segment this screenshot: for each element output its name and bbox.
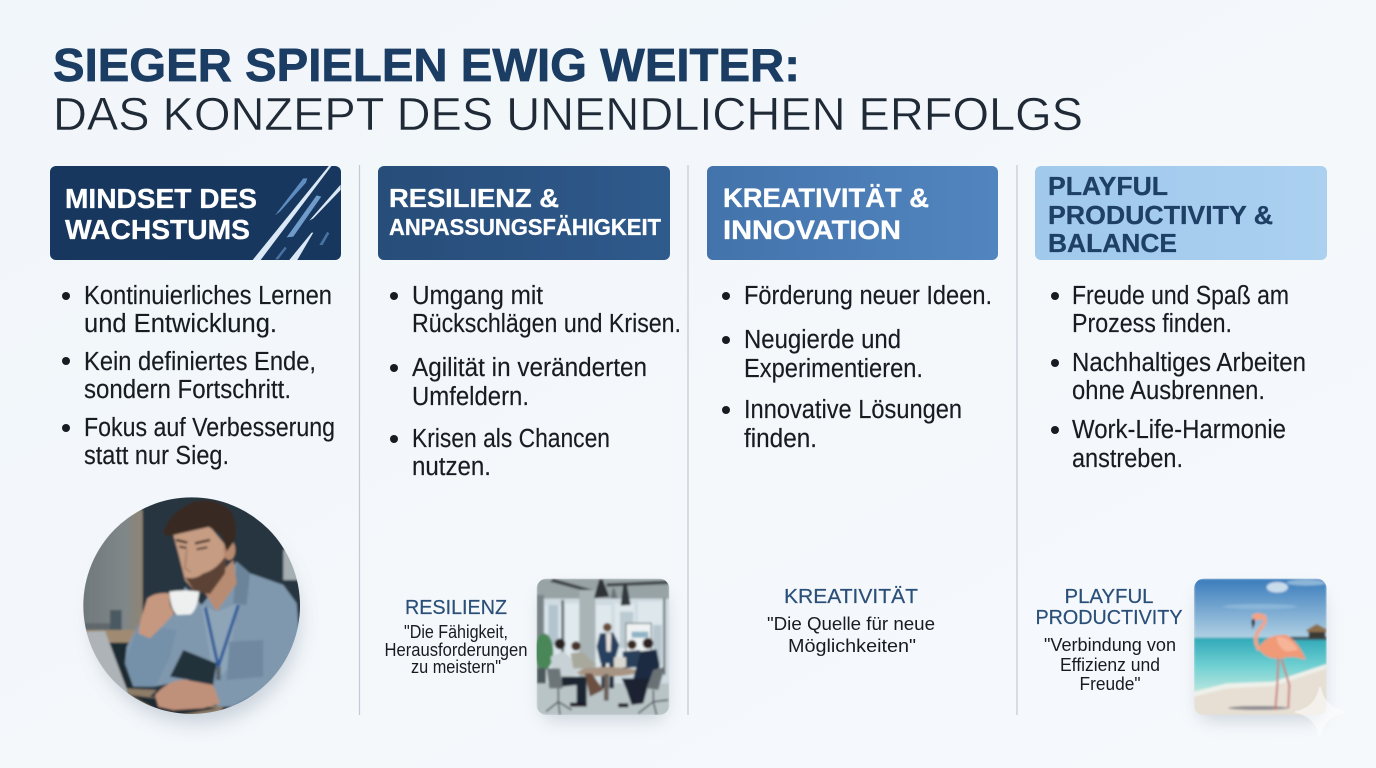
bullet list: Playful Productivity: anstreben. <box>1072 445 1183 473</box>
bullet list: Kreativität: Neugierde und <box>744 326 901 354</box>
brows and eyes <box>176 540 210 543</box>
photo: flamingo on beach <box>1194 579 1327 720</box>
raised hand <box>138 593 174 638</box>
header: Resilienz und Anpassungsfähigkeit <box>378 166 670 260</box>
header: Mindset des Wachstums: MINDSET DES <box>65 183 257 214</box>
bullet list: Resilienz: Agilität in veränderten <box>412 354 647 382</box>
panel: Playful Productivity <box>1035 166 1327 720</box>
photo: man with coffee at laptop <box>80 493 307 724</box>
bullet list: Playful Productivity: Work-Life-Harmonie <box>1072 416 1286 444</box>
bullet list: Resilienz: Umgang mit <box>412 282 543 310</box>
caption: Resilienz: "Die Fähigkeit, <box>404 622 508 642</box>
table <box>575 667 638 676</box>
caption: Playful Productivity <box>1036 586 1182 694</box>
header: Playful Productivity und Balance: PRODUCTIVITY & <box>1048 200 1273 230</box>
header: Kreativität und Innovation: KREATIVITÄT & <box>723 183 929 213</box>
plant <box>535 633 553 670</box>
bullet list: Playful Productivity: Freude und Spaß am <box>1072 282 1289 310</box>
caption: Kreativität: KREATIVITÄT <box>784 586 918 608</box>
whiteboard <box>626 623 651 663</box>
header: Mindset des Wachstums: WACHSTUMS <box>65 214 250 245</box>
header: Playful Productivity und Balance: BALANCE <box>1048 228 1177 258</box>
bullet list: Mindset: Kein definiertes Ende, <box>84 348 316 376</box>
header: Mindset des Wachstums <box>50 164 341 260</box>
person left 1 <box>555 639 565 649</box>
icon: sparkle <box>1296 688 1344 736</box>
ear <box>223 540 235 560</box>
panel: Mindset des Wachstums <box>50 164 341 724</box>
bullet list: Mindset: Kontinuierliches Lernen <box>84 282 332 310</box>
title: SIEGER SPIELEN EWIG WEITER: <box>53 39 800 91</box>
bullet list: Resilienz: nutzen. <box>412 453 491 481</box>
bullet list: Kreativität: Experimentieren. <box>744 355 923 383</box>
header: Kreativität und Innovation: INNOVATION <box>723 215 901 245</box>
bullet list: Kreativität <box>722 282 992 453</box>
caption: Playful Productivity: PLAYFUL <box>1064 586 1154 608</box>
neck <box>203 560 237 612</box>
header: Resilienz und Anpassungsfähigkeit: RESILIENZ & <box>389 183 559 213</box>
bullet list: Kreativität: finden. <box>744 425 817 453</box>
header: Kreativität und Innovation <box>707 166 998 260</box>
bullet list: Playful Productivity <box>1051 282 1306 473</box>
photo: business meeting <box>535 579 669 720</box>
bullet list: Playful Productivity: ohne Ausbrennen. <box>1072 377 1265 405</box>
bullet list: Mindset: sondern Fortschritt. <box>84 376 291 404</box>
bullet list: Resilienz: Krisen als Chancen <box>412 425 610 453</box>
presenter <box>603 623 612 632</box>
caption: Resilienz: zu meistern" <box>411 657 501 677</box>
chair bases <box>546 688 668 715</box>
bullet list: Mindset: und Entwicklung. <box>84 310 277 338</box>
panel: Kreativität <box>707 166 998 656</box>
neck and head <box>1256 615 1265 650</box>
caption: Playful Productivity: Effizienz und <box>1060 655 1160 675</box>
bullet list: Mindset <box>62 282 335 470</box>
caption: Resilienz: Herausforderungen <box>384 640 528 660</box>
header: Resilienz und Anpassungsfähigkeit: ANPASSUNGSFÄHIGKEIT <box>389 214 661 240</box>
caption: Playful Productivity: "Verbindung von <box>1044 635 1176 655</box>
header: Playful Productivity und Balance <box>1035 166 1327 260</box>
bullet list: Kreativität: Förderung neuer Ideen. <box>744 282 992 310</box>
lanyard <box>205 605 238 667</box>
caption: Resilienz <box>384 597 528 677</box>
laptop <box>86 630 129 694</box>
bullet list: Kreativität: Innovative Lösungen <box>744 396 962 424</box>
shirt body <box>125 562 302 707</box>
caption: Playful Productivity: PRODUCTIVITY <box>1036 607 1182 629</box>
bullet list: Playful Productivity: Nachhaltiges Arbeiten <box>1072 349 1306 377</box>
title: DAS KONZEPT DES UNENDLICHEN ERFOLGS <box>53 88 1083 140</box>
bullet list: Resilienz: Rückschlägen und Krisen. <box>412 310 681 338</box>
caption: Resilienz: RESILIENZ <box>405 597 507 619</box>
panel: Resilienz <box>378 166 681 720</box>
hut <box>1290 637 1327 640</box>
bullet list: Playful Productivity: Prozess finden. <box>1072 310 1232 338</box>
lower hand <box>155 680 220 710</box>
bullet list: Resilienz: Umfeldern. <box>412 383 529 411</box>
legs <box>1275 658 1278 710</box>
caption: Playful Productivity: Freude" <box>1080 674 1140 694</box>
person right <box>627 640 637 649</box>
caption: Kreativität: "Die Quelle für neue <box>767 614 935 634</box>
cup <box>169 590 199 615</box>
caption: Kreativität <box>767 586 935 656</box>
body <box>1258 635 1306 660</box>
person left 2 <box>571 641 581 651</box>
bullet list: Resilienz <box>390 282 681 481</box>
title <box>53 39 1083 140</box>
caption: Kreativität: Möglichkeiten" <box>788 636 916 656</box>
bullet list: Mindset: statt nur Sieg. <box>84 442 229 470</box>
hair <box>163 500 236 552</box>
bullet list: Mindset: Fokus auf Verbesserung <box>84 414 335 442</box>
header: Playful Productivity und Balance: PLAYFUL <box>1048 171 1168 201</box>
lamps <box>594 579 609 598</box>
shadow <box>1228 706 1288 710</box>
face <box>173 527 227 592</box>
